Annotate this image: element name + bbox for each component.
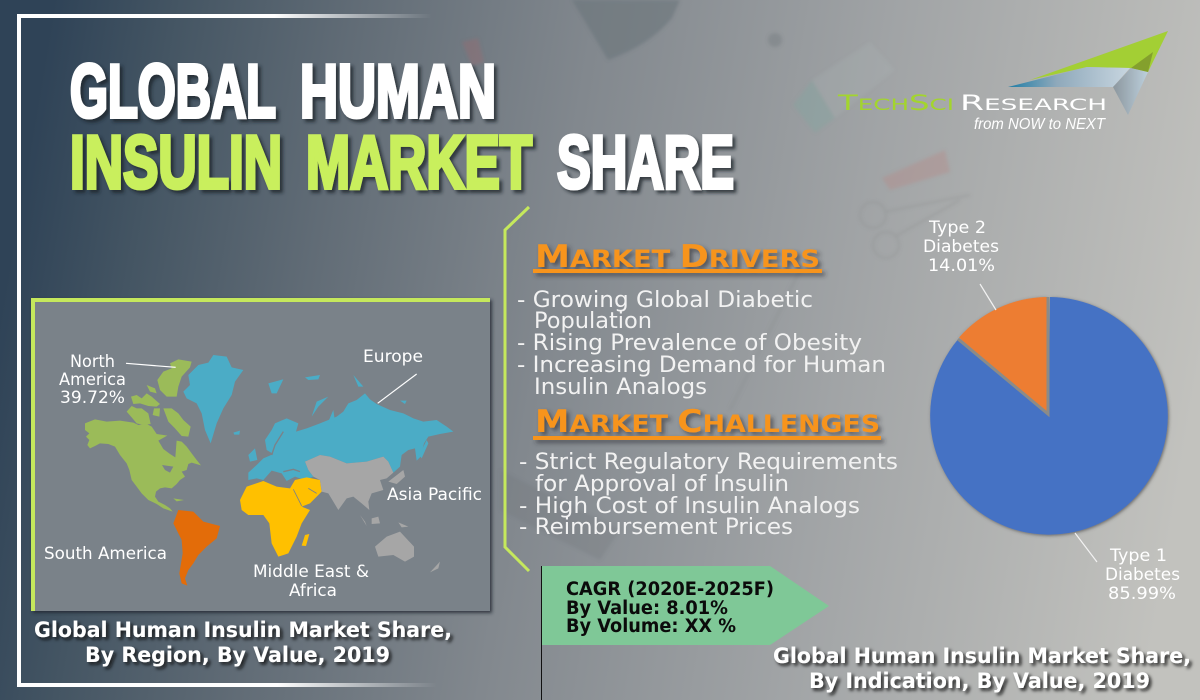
logo mark <box>1008 31 1168 115</box>
challenges list: - Reimbursement Prices <box>519 514 793 540</box>
Europe and Russia plus Greenland <box>183 355 453 481</box>
green bracket <box>505 207 529 571</box>
leader lines <box>126 363 417 403</box>
caption: by region: Global Human Insulin Market Share, <box>34 618 452 643</box>
drivers list <box>517 287 886 400</box>
North America <box>85 359 201 512</box>
Asia Pacific <box>305 455 440 572</box>
heading: market challenges: MARKET CHALLENGES <box>535 404 880 440</box>
map labels <box>44 347 482 601</box>
callout: CAGR arrow <box>542 566 829 700</box>
pie slices <box>930 297 1168 535</box>
title line 1: HUMAN <box>300 49 496 133</box>
pie label: type 2 <box>923 218 999 276</box>
pie chart: by indication <box>923 218 1180 604</box>
pie leader lines <box>980 284 1097 562</box>
title line 2 green: INSULIN <box>70 120 282 204</box>
pie label: type 2: Diabetes <box>923 237 999 257</box>
caption: by indication: By Indication, By Value, 2019 <box>809 669 1150 694</box>
world map <box>85 355 453 586</box>
South America <box>173 510 220 586</box>
pie label: type 2: 14.01% <box>928 256 995 276</box>
caption: by region <box>34 618 452 668</box>
callout: CAGR arrow: CAGR (2020E-2025F) <box>566 579 774 600</box>
challenges list: - High Cost of Insulin Analogs <box>519 493 860 519</box>
challenges list <box>519 449 898 540</box>
caption: by region: By Region, By Value, 2019 <box>85 643 390 668</box>
challenges list: - Strict Regulatory Requirements <box>519 449 898 475</box>
heading: market drivers: MARKET DRIVERS <box>535 239 820 275</box>
drivers list: - Increasing Demand for Human <box>517 352 886 378</box>
panel: world map by region <box>31 298 490 611</box>
title line 2 green: MARKET <box>306 120 532 204</box>
title line 1: GLOBAL <box>70 49 276 133</box>
title line 2 green <box>70 120 532 204</box>
challenges list: for Approval of Insulin <box>535 471 789 497</box>
pie label: type 1: Type 1 <box>1109 546 1167 566</box>
map labels: Asia Pacific <box>387 485 482 505</box>
caption: by indication <box>773 644 1191 694</box>
panel background <box>31 298 490 611</box>
pie label: type 2: Type 2 <box>928 218 986 238</box>
logo tagline: from NOW to NEXT <box>974 116 1106 133</box>
map labels: South America <box>44 544 167 564</box>
panel: market drivers <box>517 239 886 400</box>
map labels: Africa <box>289 581 337 601</box>
Africa and Middle East <box>240 477 322 557</box>
title <box>70 49 734 204</box>
Baltic and inland seas <box>272 432 300 472</box>
callout: CAGR arrow: By Value: 8.01% <box>566 598 728 619</box>
map labels: Europe <box>363 347 423 367</box>
callout: CAGR arrow: By Volume: XX % <box>566 616 736 637</box>
logo: TechSci Research: R ESEARCH <box>960 91 1107 115</box>
drivers list: Insulin Analogs <box>534 374 707 400</box>
panel: market challenges <box>519 404 898 540</box>
drivers list: Population <box>534 308 652 334</box>
pie gap <box>958 297 1048 414</box>
pie label: type 1 <box>1105 546 1180 604</box>
map labels: Middle East & <box>253 562 369 582</box>
caption: by indication: Global Human Insulin Market Share, <box>773 644 1191 669</box>
logo: TechSci Research <box>836 31 1168 133</box>
Hudson Bay <box>158 435 177 457</box>
map labels: 39.72% <box>60 388 125 408</box>
map labels: North <box>70 352 115 372</box>
logo wordmark: T ECH S CI <box>836 91 954 115</box>
drivers list: - Growing Global Diabetic <box>517 287 813 313</box>
pie label: type 1: 85.99% <box>1108 584 1176 604</box>
pie label: type 1: Diabetes <box>1105 565 1180 585</box>
decorative white frame <box>17 14 437 687</box>
title line 2 white: SHARE <box>557 120 734 204</box>
drivers list: - Rising Prevalence of Obesity <box>517 330 862 356</box>
map labels: America <box>59 370 126 390</box>
